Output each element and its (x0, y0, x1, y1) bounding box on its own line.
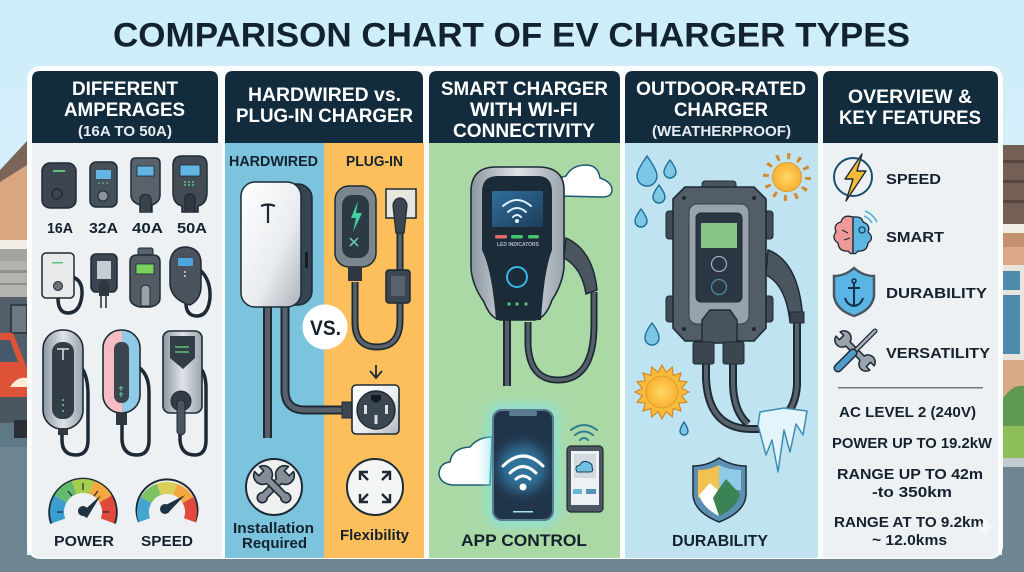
label: hardwired: HARDWIRED (229, 153, 318, 170)
panel: outdoor-rated (625, 71, 818, 558)
heading: different amperages: DIFFERENT (72, 79, 178, 100)
label: plug-in: PLUG-IN (346, 153, 403, 170)
gauge labels (54, 533, 193, 550)
heading: hardwired vs plug-in (236, 85, 413, 127)
heading: hardwired vs plug-in: PLUG-IN CHARGER (236, 106, 413, 127)
icon: glowing phone (488, 405, 558, 525)
vs badge: VS. (310, 317, 341, 340)
panel: smart charger (429, 71, 620, 558)
label: durability: DURABILITY (672, 533, 768, 550)
label: installation required (233, 520, 314, 552)
led label: LED INDICATORS (497, 242, 540, 248)
spec list: -to 350km (872, 484, 952, 501)
icon: rounded blue-screen charger (170, 247, 210, 316)
icon: tesla portable charger (43, 330, 88, 455)
icon: top sun (766, 156, 808, 198)
heading: hardwired vs plug-in: HARDWIRED vs. (248, 85, 401, 106)
icon: speed bolt (834, 154, 872, 201)
label: flexibility: Flexibility (340, 527, 410, 544)
icon: 40A charger (131, 158, 160, 212)
label: smart: SMART (886, 229, 944, 246)
label: installation required: Required (242, 535, 307, 552)
spec list: RANGE UP TO 42m (837, 466, 983, 483)
gauge: speed (136, 479, 198, 522)
label: durability: DURABILITY (886, 285, 987, 302)
icon: smart wall charger (471, 167, 564, 320)
icon: durability shield (693, 458, 746, 522)
panel: different amperages (32, 71, 222, 558)
icon: 16A charger (42, 163, 76, 208)
spec list: AC LEVEL 2 (240V) (839, 404, 976, 421)
heading: different amperages: AMPERAGES (64, 100, 185, 121)
heading: smart charger: CONNECTIVITY (453, 121, 595, 142)
spec list: RANGE AT TO 9.2km (834, 514, 984, 531)
arrow: down to socket (370, 365, 382, 378)
spec list (832, 404, 993, 549)
icon: white wall charger (42, 253, 82, 313)
heading: outdoor-rated: CHARGER (674, 100, 768, 121)
heading: outdoor-rated: (WEATHERPROOF) (652, 123, 791, 140)
heading: overview: KEY FEATURES (839, 108, 981, 129)
amperage labels (47, 220, 207, 237)
gauge labels: POWER (54, 533, 114, 550)
icon: weatherproof cables (706, 250, 804, 429)
label: versatility: VERSATILITY (886, 345, 990, 362)
icon: small phone with wifi (567, 425, 603, 512)
icon: silver charger (163, 331, 206, 455)
icon: tools circle (246, 459, 302, 515)
heading: smart charger: SMART CHARGER (441, 79, 608, 100)
gauge labels: SPEED (141, 533, 193, 550)
heading: different amperages: (16A TO 50A) (78, 123, 172, 140)
spec list: ~ 12.0kms (872, 532, 947, 549)
icon: water drops (635, 156, 688, 435)
icon: hardwired wall charger (241, 182, 312, 307)
heading: different amperages (64, 79, 185, 140)
title: COMPARISON CHART OF EV CHARGER TYPES (113, 16, 910, 54)
label: speed: SPEED (886, 171, 941, 188)
panel: hardwired vs plug-in (225, 71, 424, 558)
heading: overview: OVERVIEW & (848, 87, 972, 108)
panel: overview and key features (823, 71, 998, 558)
icon: dark plug charger (91, 254, 117, 308)
amperage labels: 50A (177, 220, 207, 237)
heading: smart charger (441, 79, 608, 142)
heading: outdoor-rated: OUTDOOR-RATED (636, 79, 806, 100)
ring indicator (507, 267, 527, 287)
icon: wrench and screwdriver (832, 328, 878, 374)
icon: 32A charger (90, 162, 117, 207)
icon: charger cables (507, 238, 597, 386)
heading: outdoor-rated (636, 79, 806, 140)
amperage labels: 16A (47, 220, 73, 237)
icon: ice block (758, 408, 807, 472)
icon: flexibility circle (347, 459, 403, 515)
heading: smart charger: WITH WI-FI (470, 100, 578, 121)
icon: plug-in charger (335, 186, 416, 347)
icon: green-screen charger (130, 248, 160, 307)
icon: pink and blue charger (103, 330, 149, 455)
icon: hardwired cables (268, 305, 342, 438)
label: installation required: Installation (233, 520, 314, 537)
gauge: power (49, 479, 117, 524)
amperage labels: 32A (89, 220, 118, 237)
vs badge (302, 304, 348, 350)
icon: durability anchor shield (834, 268, 874, 316)
spec list: POWER UP TO 19.2kW (832, 435, 993, 452)
icon: cloud (555, 165, 612, 197)
icon: weatherproof charger (666, 181, 773, 364)
icon: wall socket (342, 385, 399, 434)
icon: left cloud (439, 437, 492, 485)
icon: smart brain (834, 211, 877, 254)
label: app control: APP CONTROL (461, 531, 587, 550)
icon: bottom sun (635, 365, 689, 419)
heading: overview (839, 87, 981, 129)
icon: 50A charger (173, 156, 207, 212)
amperage labels: 40A (132, 220, 163, 237)
